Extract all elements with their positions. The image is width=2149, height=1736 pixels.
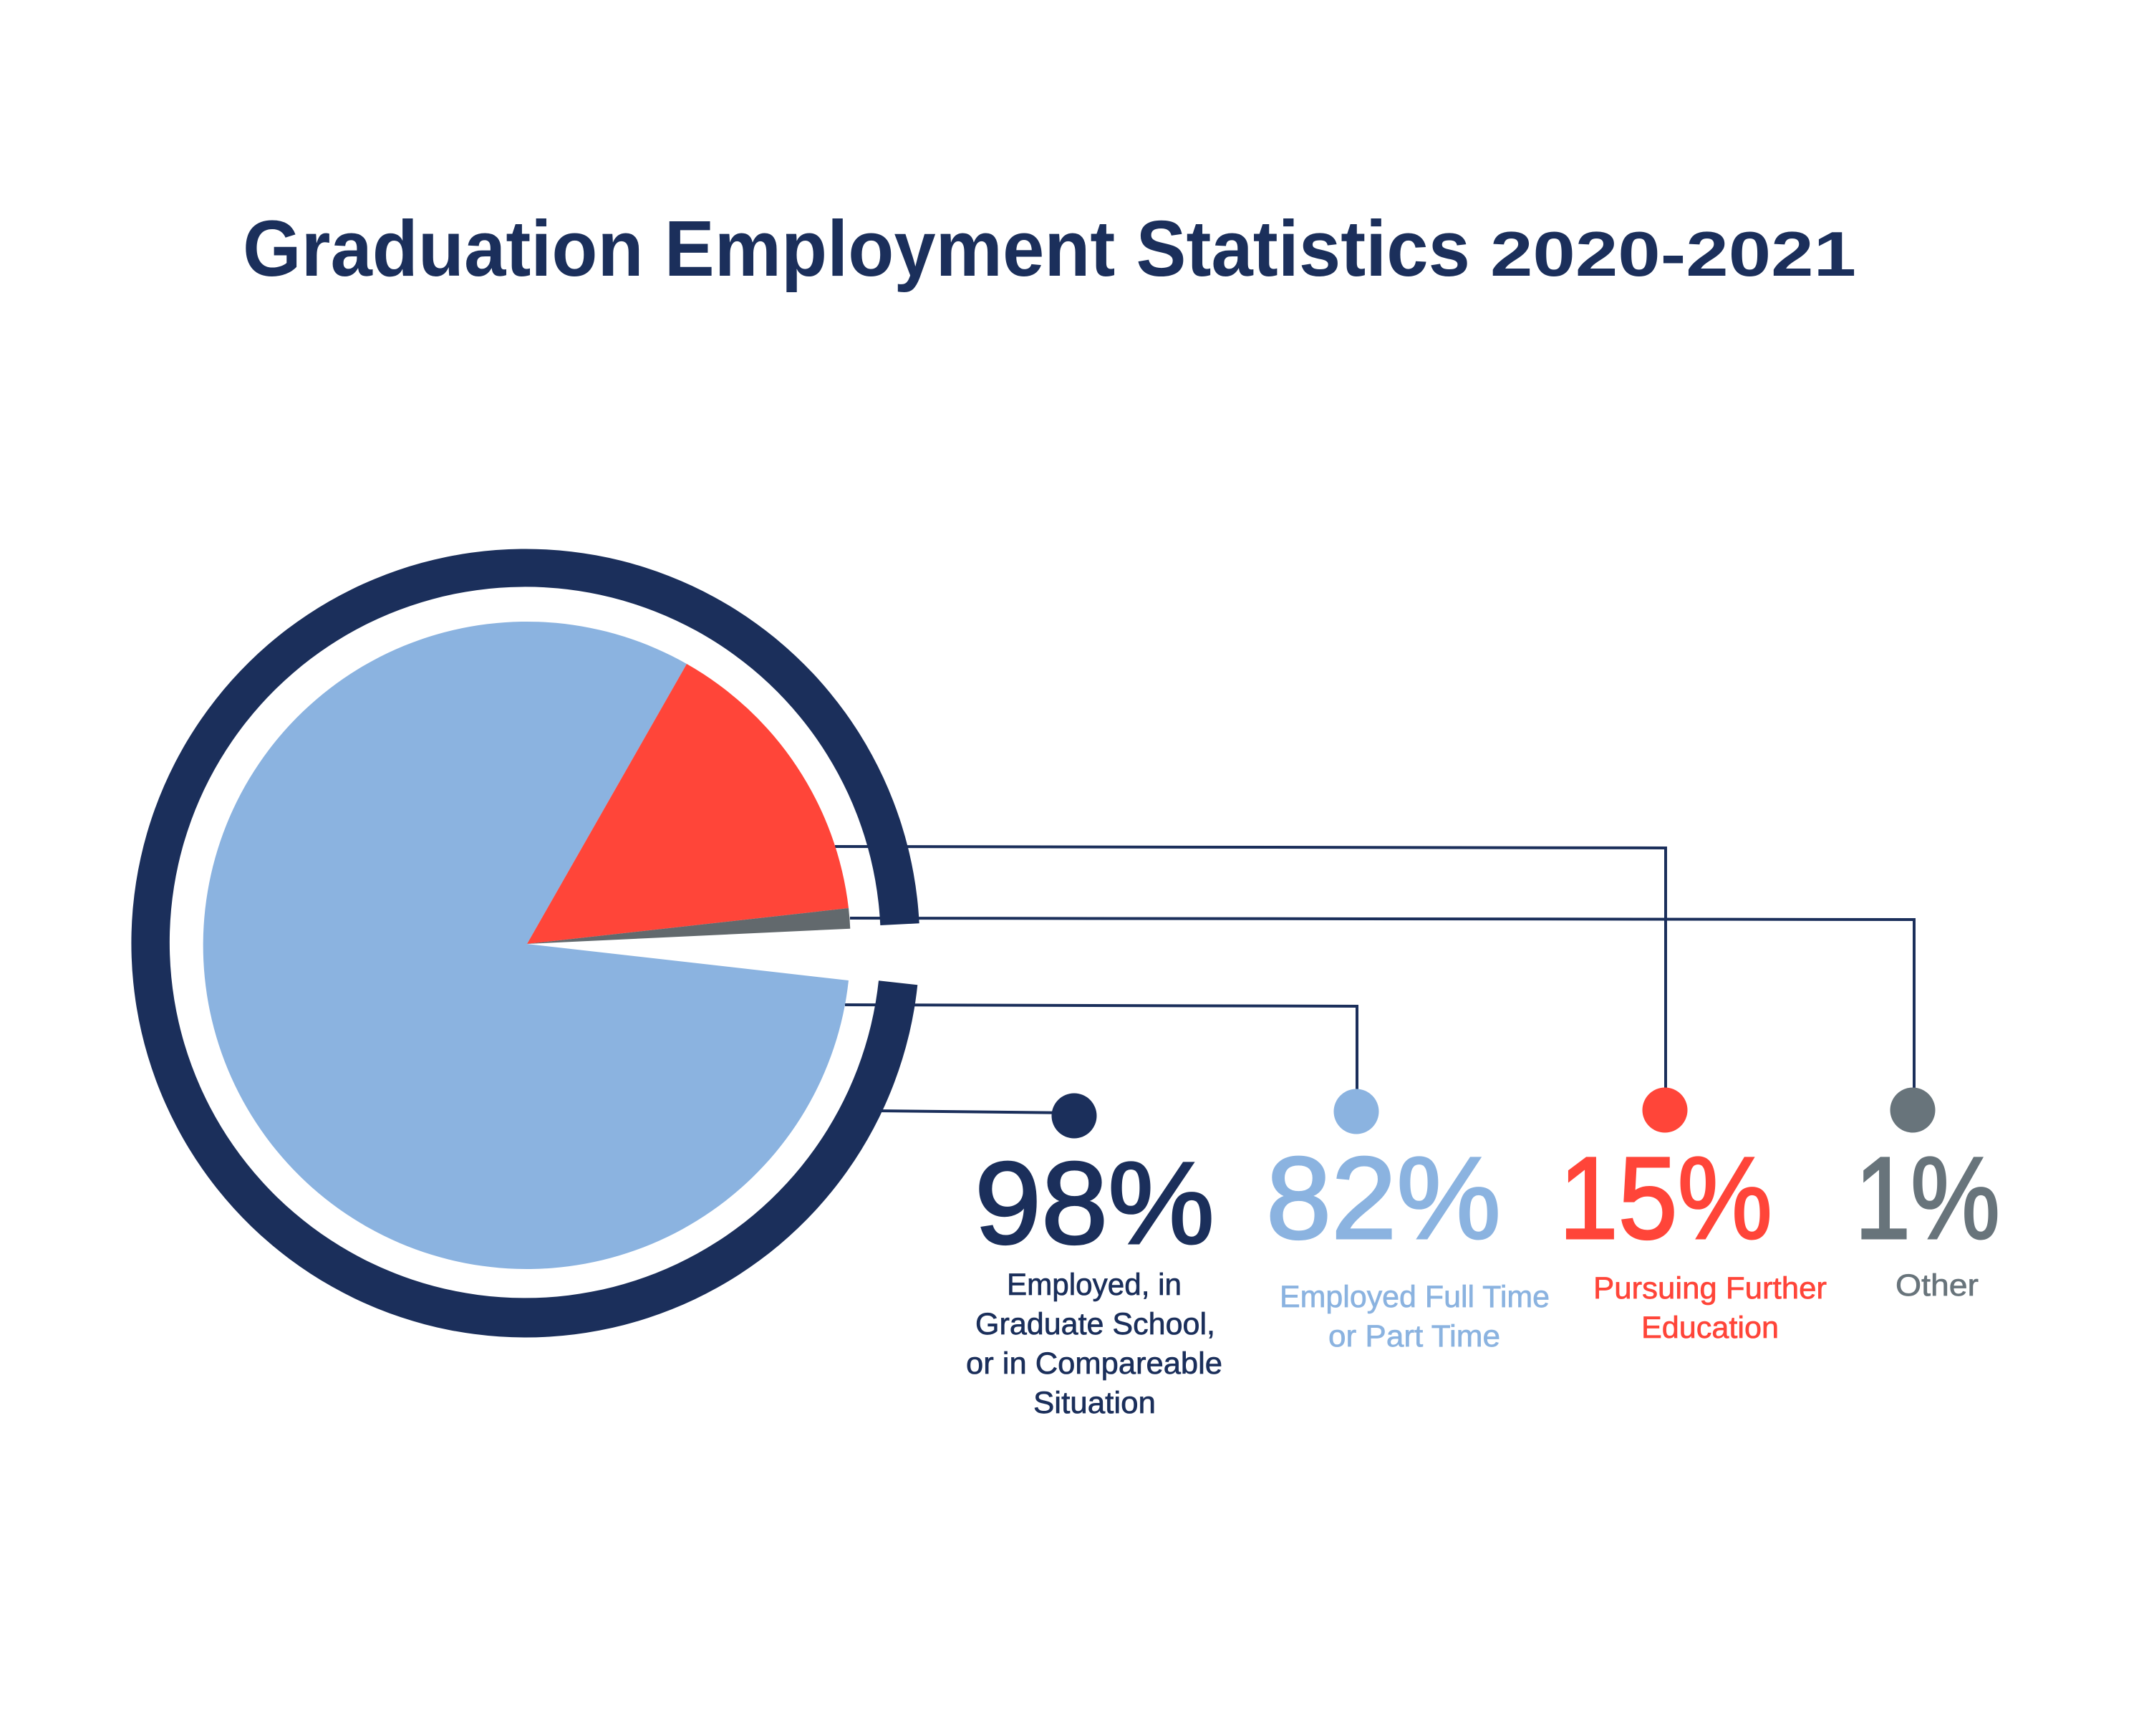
label: employed, in graduate school, or in comparable situation: Graduate School, <box>975 1307 1215 1341</box>
label: employed full time or part time <box>1280 1280 1550 1354</box>
stat: 98%: 98% <box>975 1137 1214 1268</box>
title: 2020-2021 <box>1490 218 1856 289</box>
title: Graduation Employment Statistics <box>243 205 1470 293</box>
connector: other <box>850 918 1914 1110</box>
stat: 82%: 82% <box>1266 1132 1501 1263</box>
connector: further education <box>835 847 1666 1110</box>
label: other: Other <box>1896 1268 1979 1303</box>
label: employed full time or part time: Employed Full Time <box>1280 1280 1550 1314</box>
legend dot: 98% <box>1051 1093 1097 1139</box>
pie slice: other 1% <box>527 908 850 944</box>
stat: 98% <box>966 1137 1222 1420</box>
label: employed, in graduate school, or in comparable situation: or in Compareable <box>966 1346 1222 1381</box>
legend dot: 1% <box>1890 1087 1935 1133</box>
legend dot: 15% <box>1643 1087 1687 1133</box>
connector lines <box>835 847 1914 1113</box>
stat: 15% <box>1559 1132 1827 1345</box>
label: pursuing further education: Education <box>1641 1311 1779 1345</box>
stat: 82% <box>1266 1132 1550 1354</box>
pie slice: employed 82% <box>203 622 849 1269</box>
label: employed, in graduate school, or in comparable situation <box>966 1268 1222 1420</box>
label: pursuing further education: Pursuing Further <box>1593 1271 1827 1306</box>
connector: employed overall <box>877 1111 1074 1113</box>
stat: 1% <box>1855 1132 2000 1303</box>
pie slice: further education 15% <box>527 664 849 944</box>
outer ring: 98% <box>131 549 919 1337</box>
label: employed, in graduate school, or in comparable situation: Situation <box>1033 1386 1156 1420</box>
connector: employed full or part time <box>845 1005 1357 1111</box>
stat: 15%: 15% <box>1559 1132 1772 1263</box>
label: employed, in graduate school, or in comparable situation: Employed, in <box>1007 1268 1182 1302</box>
stat: 1%: 1% <box>1855 1132 2000 1263</box>
label: pursuing further education <box>1593 1271 1827 1345</box>
pie chart <box>203 622 850 1269</box>
label: employed full time or part time: or Part Time <box>1328 1319 1500 1354</box>
legend dot: 82% <box>1333 1089 1379 1134</box>
